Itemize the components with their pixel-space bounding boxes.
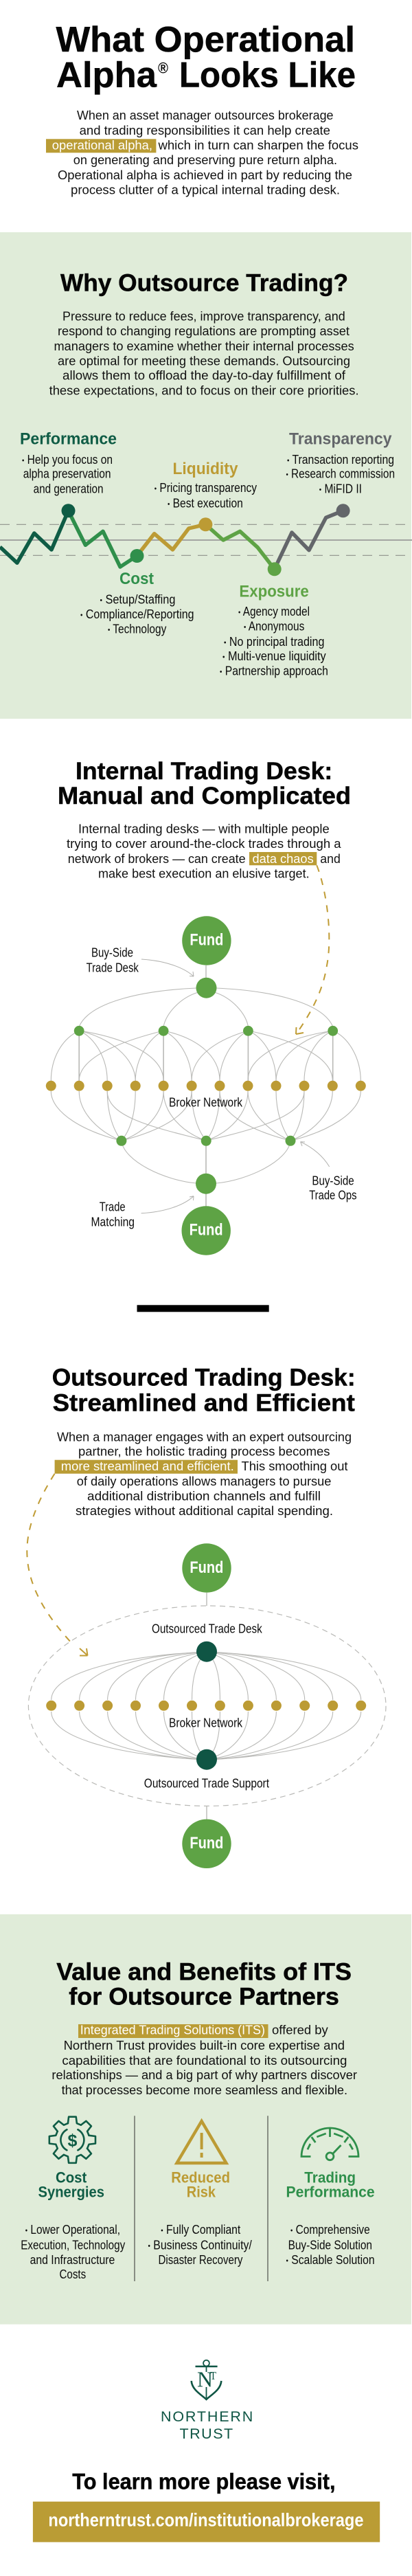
logo: northern trust: TRUST: [180, 2426, 233, 2442]
intro text block: on generating and preserving pure return alpha.: [73, 153, 337, 167]
intro text block: Operational alpha is achieved in part by reducing the: [58, 168, 352, 182]
outsourced desk text block: strategies without additional capital spending.: [76, 1504, 333, 1518]
column: cost synergies: •: [25, 2226, 27, 2235]
why outsource text block: managers to examine whether their internal processes: [54, 339, 354, 353]
call to action button: [33, 2502, 380, 2542]
column: trading performance: Performance: [286, 2184, 375, 2201]
cost label: Cost: [119, 570, 154, 588]
column: reduced risk: Risk: [187, 2184, 216, 2201]
liquidity label: •: [168, 500, 170, 508]
column: reduced risk: •: [161, 2226, 163, 2235]
cost label: [80, 570, 194, 636]
logo: northern trust: [161, 2360, 253, 2442]
arrow: streamlined to network: [27, 1474, 87, 1656]
why outsource text block: Pressure to reduce fees, improve transparency, and: [62, 310, 345, 324]
intro text block: and trading responsibilities it can help create: [80, 124, 330, 137]
label: trade matching: Matching: [91, 1216, 135, 1229]
call to action heading: To learn more please visit,: [72, 2469, 336, 2494]
why outsource text block: allows them to offload the day-to-day fulfillment of: [62, 369, 346, 383]
label: trade matching: [91, 1200, 135, 1229]
internal desk text block: and: [320, 852, 341, 866]
column: cost synergies: Synergies: [38, 2184, 104, 2201]
heading: outsourced trading desk: [52, 1365, 356, 1416]
internal desk text block: Internal trading desks — with multiple people: [78, 822, 330, 836]
internal desk text block: trying to cover around-the-clock trades through a: [67, 837, 342, 851]
heading: value and benefits: Value and Benefits of ITS: [56, 1959, 352, 1986]
cost label: •: [80, 612, 83, 620]
column: reduced risk: Fully Compliant: [163, 2223, 240, 2237]
cost label: Technology: [110, 622, 166, 636]
exposure label: Anonymous: [246, 620, 304, 634]
exposure label: [220, 583, 328, 678]
title: [56, 20, 356, 96]
column: reduced risk: [148, 2169, 252, 2267]
value text block: relationships — and a big part of why partners discover: [52, 2068, 357, 2082]
value text block: offered by: [272, 2024, 328, 2037]
column: trading performance: Buy-Side Solution: [288, 2238, 372, 2252]
trade matching node: [196, 1174, 216, 1194]
transparency label: Research commission: [288, 467, 395, 481]
intro text block: [46, 109, 358, 197]
performance label: alpha preservation: [23, 467, 111, 481]
fund node top: [182, 1543, 231, 1593]
liquidity label: Liquidity: [173, 460, 238, 478]
icon: anchor: [192, 2360, 221, 2399]
fund node bottom: Fund: [190, 1221, 223, 1240]
why outsource text block: are optimal for meeting these demands. Outsourcing: [58, 355, 350, 368]
arrow: buy-side trade ops: [301, 1142, 330, 1167]
exposure label: No principal trading: [226, 635, 324, 649]
title: What Operational: [56, 20, 355, 60]
outsourced desk text block: When a manager engages with an expert outsourcing: [57, 1430, 352, 1444]
exposure label: Partnership approach: [222, 664, 328, 678]
broker nodes: [46, 1701, 366, 1711]
label: buy-side trade desk: Trade Desk: [87, 961, 139, 975]
heading: value and benefits: [56, 1959, 352, 2010]
heading: internal trading desk: Internal Trading Desk:: [76, 758, 332, 785]
column: cost synergies: [21, 2169, 125, 2281]
heading: internal trading desk: Manual and Complicated: [58, 783, 351, 809]
transparency label: [286, 430, 395, 495]
outsourced trade desk node: [196, 1642, 217, 1662]
why outsource text block: [49, 310, 359, 398]
transparency label: •: [319, 486, 321, 494]
transparency label: •: [286, 471, 288, 479]
column: cost synergies: Cost: [56, 2169, 87, 2186]
panel: value and benefits: [0, 1914, 411, 2325]
heading: internal trading desk: [58, 758, 351, 809]
icon: warning triangle: [177, 2121, 227, 2163]
outsourced desk text block: [55, 1430, 352, 1518]
liquidity label: Best execution: [170, 496, 243, 510]
liquidity label: Pricing transparency: [157, 481, 257, 495]
label: outsourced trade support: Outsourced Trade Support: [144, 1777, 269, 1791]
fund node top: [182, 916, 231, 965]
value text block: Integrated Trading Solutions (ITS): [80, 2024, 265, 2037]
transparency label: Transparency: [289, 430, 392, 449]
exposure label: •: [244, 623, 246, 631]
label: broker network: Broker Network: [169, 1096, 243, 1110]
intro text block: When an asset manager outsources brokerage: [77, 109, 334, 122]
value text block: [52, 2024, 357, 2097]
label: broker network: Broker Network: [169, 1716, 243, 1729]
outsourced trade support node: [196, 1749, 217, 1770]
internal desk text block: network of brokers — can create: [68, 852, 246, 866]
column: cost synergies: Execution, Technology: [21, 2238, 125, 2252]
trader nodes: [74, 1026, 338, 1036]
network connection lines: [51, 965, 360, 1207]
heading: value and benefits: for Outsource Partners: [69, 1983, 339, 2010]
logo: northern trust: NORTHERN: [161, 2408, 253, 2425]
column: reduced risk: Reduced: [171, 2169, 230, 2186]
line chart: threshold lines and trend: [0, 504, 412, 576]
icon: anchor: N: [197, 2366, 213, 2391]
title: Alpha: [56, 56, 157, 96]
why outsource text block: respond to changing regulations are prompting asset: [58, 324, 350, 338]
heading: outsourced trading desk: Outsourced Trading Desk:: [52, 1365, 356, 1391]
outsourced desk text block: This smoothing out: [242, 1459, 347, 1473]
transparency label: Transaction reporting: [289, 453, 394, 467]
diagram: outsourced trading network: [28, 1543, 386, 1868]
exposure label: Multi-venue liquidity: [225, 649, 326, 663]
title: Looks Like: [179, 56, 356, 96]
title: ®: [158, 60, 168, 77]
label: trade matching: Trade: [100, 1200, 126, 1214]
exposure label: •: [220, 668, 222, 676]
why outsource text block: these expectations, and to focus on their core priorities.: [49, 384, 359, 398]
broker nodes: [46, 1081, 366, 1091]
label: buy-side trade ops: Buy-Side: [312, 1174, 354, 1188]
exposure label: Agency model: [240, 605, 310, 618]
fund node bottom: [181, 1206, 231, 1255]
arrow: data chaos to network: [296, 865, 329, 1034]
column: reduced risk: •: [148, 2242, 150, 2250]
column: trading performance: Scalable Solution: [288, 2253, 375, 2267]
buy-side trade desk node: [196, 978, 217, 998]
outsourced desk text block: partner, the holistic trading process becomes: [78, 1444, 330, 1458]
fund node top: Fund: [190, 931, 223, 950]
connector lines and dashed boundary: [28, 1593, 386, 1819]
icon: gear with dollar: $: [67, 2131, 77, 2150]
label: buy-side trade ops: [309, 1174, 357, 1202]
liquidity label: [154, 460, 257, 510]
outsourced desk text block: of daily operations allows managers to pursue: [77, 1475, 331, 1488]
internal desk text block: data chaos: [253, 852, 314, 866]
performance label: Performance: [20, 430, 117, 449]
intro text block: which in turn can sharpen the focus: [157, 138, 358, 152]
transparency label: •: [287, 456, 290, 464]
column: trading performance: •: [286, 2256, 288, 2265]
liquidity label: •: [154, 485, 157, 493]
operations nodes: [116, 1136, 295, 1146]
performance label: and generation: [34, 482, 103, 495]
cost label: •: [108, 626, 110, 634]
icon: gear with dollar: [49, 2117, 95, 2163]
column: reduced risk: Disaster Recovery: [158, 2253, 242, 2267]
panel: why outsource trading: [0, 232, 412, 719]
internal desk text block: make best execution an elusive target.: [98, 867, 310, 881]
value text block: that processes become more seamless and flexible.: [62, 2083, 347, 2097]
column: trading performance: Trading: [304, 2169, 356, 2186]
column: trading performance: Comprehensive: [293, 2223, 370, 2237]
icon: anchor: T: [210, 2369, 217, 2382]
label: buy-side trade ops: Trade Ops: [309, 1189, 357, 1202]
outsourced desk text block: more streamlined and efficient.: [61, 1459, 234, 1473]
exposure label: Exposure: [239, 583, 309, 601]
intro text block: process clutter of a typical internal trading desk.: [71, 183, 340, 197]
arrow: trade matching: [141, 1196, 194, 1213]
heading: why outsource trading: Why Outsource Trading?: [60, 269, 348, 296]
arrow: buy-side trade desk: [141, 959, 194, 976]
call to action button: northerntrust.com/institutionalbrokerage: [48, 2510, 364, 2531]
cost label: •: [100, 596, 102, 605]
outsourced desk text block: additional distribution channels and fulfill: [87, 1489, 321, 1503]
column: trading performance: •: [290, 2226, 293, 2235]
diagram: internal trading network: [46, 916, 366, 1255]
fund node top: Fund: [190, 1558, 223, 1577]
column: trading performance: [286, 2169, 375, 2267]
label: buy-side trade desk: [87, 946, 139, 975]
internal desk text block: [67, 822, 342, 881]
exposure label: •: [222, 653, 225, 661]
cost label: Setup/Staffing: [102, 593, 175, 607]
intro text block: operational alpha,: [52, 138, 152, 152]
cost label: Compliance/Reporting: [82, 607, 194, 621]
performance label: [20, 430, 117, 495]
performance label: Help you focus on: [24, 453, 113, 467]
column: reduced risk: Business Continuity/: [150, 2238, 252, 2252]
label: outsourced trade desk: Outsourced Trade Desk: [152, 1622, 263, 1636]
transparency label: MiFID II: [321, 482, 362, 495]
icon: speedometer gauge: [301, 2128, 358, 2160]
exposure label: •: [238, 609, 240, 617]
column: cost synergies: and Infrastructure: [30, 2253, 115, 2267]
fund node bottom: [182, 1819, 231, 1868]
value text block: Northern Trust provides built-in core expertise and: [64, 2039, 345, 2052]
column: cost synergies: Costs: [59, 2267, 86, 2281]
value text block: capabilities that are foundational to its outsourcing: [62, 2054, 347, 2068]
fund node bottom: Fund: [190, 1834, 223, 1852]
column: cost synergies: Lower Operational,: [27, 2223, 120, 2237]
performance label: •: [22, 456, 24, 464]
exposure label: •: [224, 639, 227, 647]
label: buy-side trade desk: Buy-Side: [91, 946, 133, 960]
heading: outsourced trading desk: Streamlined and Efficient: [53, 1389, 355, 1416]
